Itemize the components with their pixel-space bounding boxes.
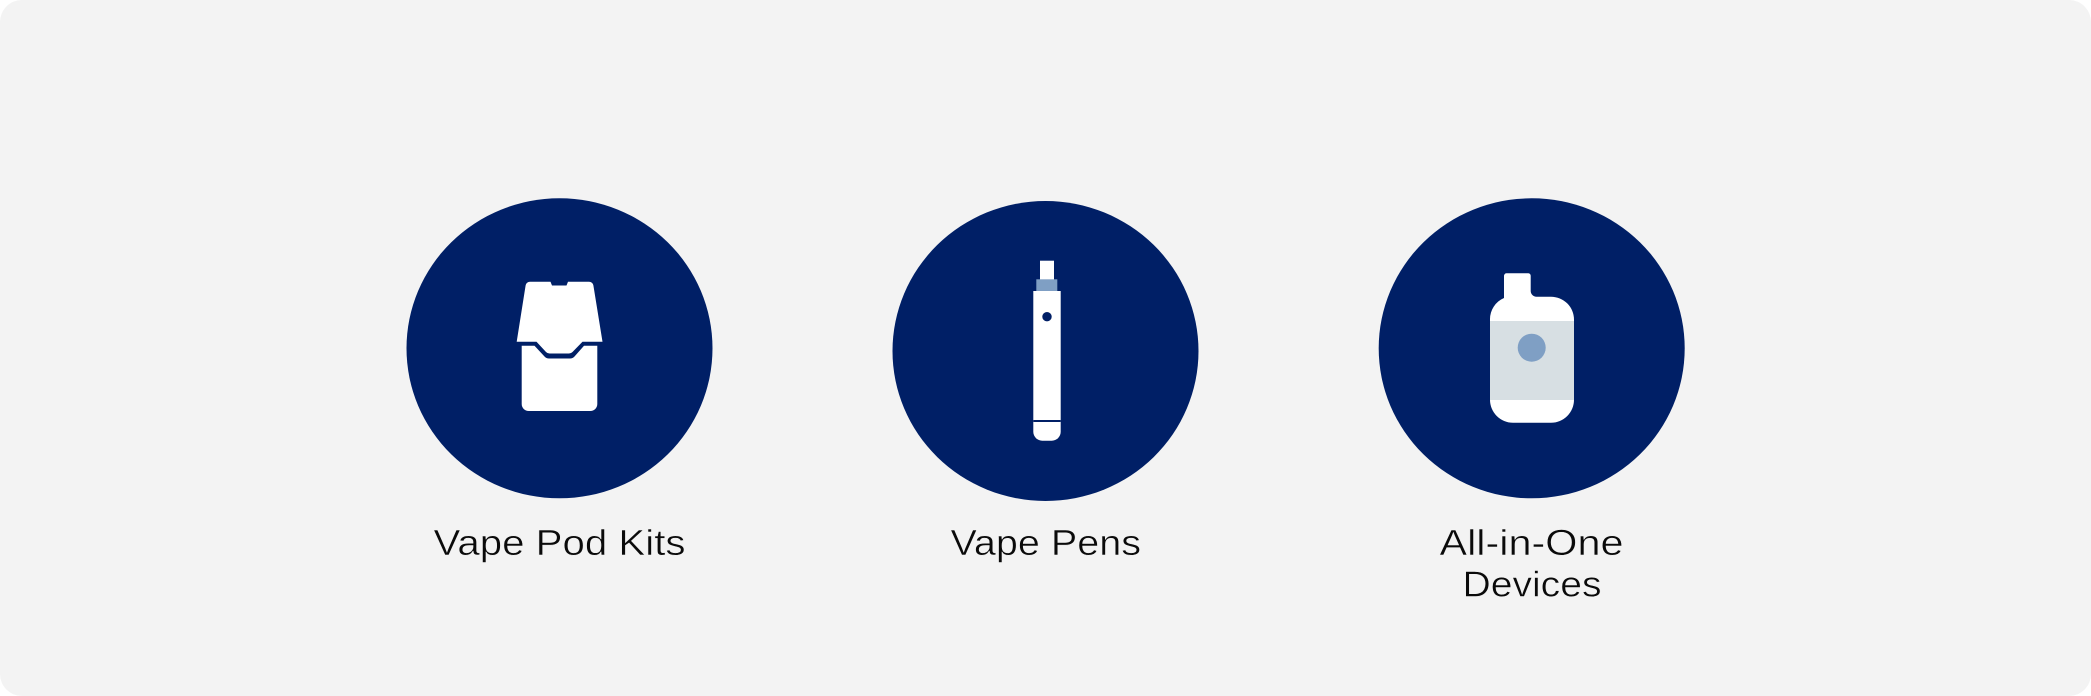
item: All-in-One Devices: [1379, 198, 1685, 605]
circle: all-in-one badge: [1379, 198, 1685, 498]
icon: vape pod kit: [517, 282, 602, 411]
icon: disposable device: [1490, 273, 1574, 423]
icon: vape pen: [1033, 261, 1061, 441]
label: Vape Pens: Vape Pens: [950, 522, 1141, 563]
label: Vape Pod Kits: Vape Pod Kits: [434, 522, 686, 563]
item: Vape Pod Kits: [406, 198, 712, 563]
label: All-in-One Devices: All-in-One: [1440, 522, 1624, 563]
circle: pod kit badge: [406, 198, 712, 498]
label: All-in-One Devices: [1440, 522, 1624, 605]
circle: vape pen badge: [892, 201, 1198, 501]
label: All-in-One Devices: Devices: [1462, 564, 1602, 605]
item: Vape Pens: [892, 201, 1198, 563]
